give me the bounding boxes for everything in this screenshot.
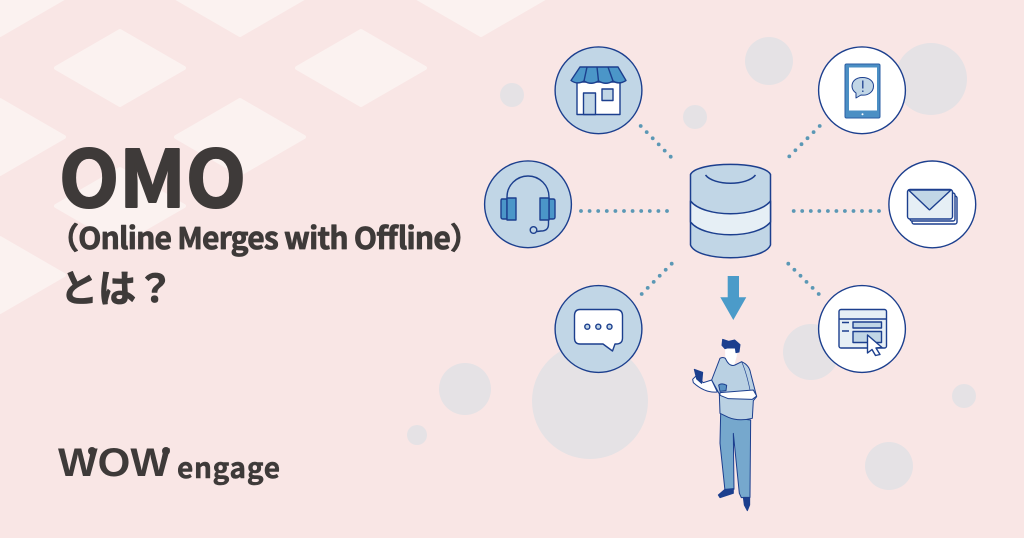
icon: envelopes bbox=[889, 161, 976, 248]
icon: tablet with alert bbox=[819, 47, 905, 134]
icon: database cylinder bbox=[690, 164, 770, 258]
title: OMO: OMO bbox=[59, 118, 246, 230]
icon: store bbox=[555, 47, 642, 134]
illustration: person with phone bbox=[693, 339, 757, 511]
logo: WOW engage: WOW bbox=[58, 441, 170, 485]
icon: chat bubble bbox=[555, 286, 642, 372]
connector dots bbox=[579, 124, 881, 296]
icon: web page with cursor bbox=[819, 286, 905, 372]
subtitle: Online Merges with Offline: （Online Merges with Offline） bbox=[49, 214, 480, 258]
heading: とは？: とは？ bbox=[60, 258, 174, 313]
logo: WOW engage bbox=[58, 441, 280, 487]
arrow: down bbox=[720, 276, 746, 320]
logo: WOW engage: engage bbox=[177, 447, 280, 487]
icon: headset bbox=[485, 161, 571, 248]
